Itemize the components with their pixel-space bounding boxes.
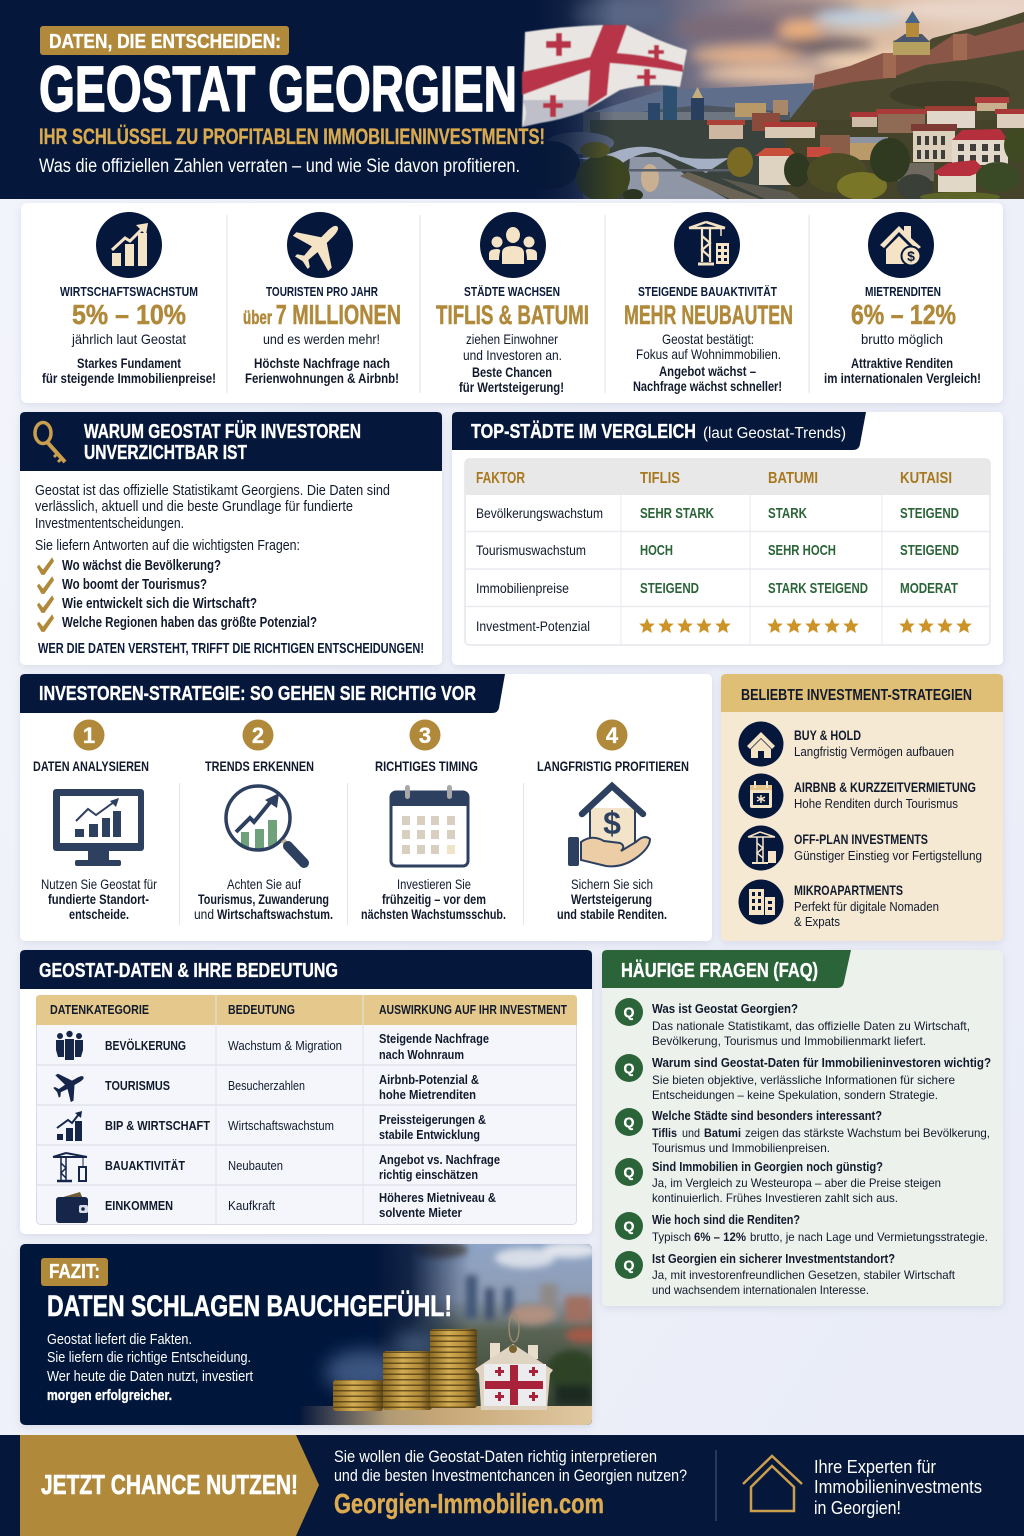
icon: crane	[53, 1153, 87, 1181]
experts text: Immobilieninvestments	[814, 1476, 982, 1497]
flag house	[475, 1314, 553, 1410]
FAQ 2: Entscheidungen – keine Spekulation, sondern Strategie.	[652, 1088, 938, 1102]
FAQ 5: 6% – 12%	[694, 1230, 746, 1244]
table header: BATUMI	[768, 470, 818, 487]
FAQ 5	[615, 1212, 988, 1244]
FAQ 5: brutto, je nach Lage und Vermietungsstrategie.	[750, 1230, 988, 1244]
icon: airplane	[284, 209, 355, 280]
caption	[557, 877, 667, 922]
row: Bauaktivität: Angebot vs. Nachfrage	[379, 1152, 500, 1167]
heading	[20, 674, 505, 713]
caption: und stabile Renditen.	[557, 907, 667, 922]
item: Airbnb	[738, 774, 976, 818]
stat: Städte wachsen: Beste Chancen	[472, 365, 552, 380]
row: Einkommen: EINKOMMEN	[105, 1198, 173, 1213]
icon: house	[738, 722, 784, 766]
step number: 2	[252, 723, 264, 748]
subtitle: IHR SCHLÜSSEL ZU PROFITABLEN IMMOBILIENINVESTMENTS!	[39, 124, 545, 149]
row: Immobilienpreise	[476, 580, 958, 597]
row: Immobilienpreise: STARK STEIGEND	[768, 580, 868, 597]
icon: crane	[674, 212, 740, 278]
table header: FAKTOR	[476, 470, 525, 487]
caption	[361, 877, 506, 922]
text block: introduction: Geostat ist das offizielle Statistikamt Georgiens. Die Daten sind	[35, 483, 390, 499]
row: Tourismuswachstum: HOCH	[640, 542, 673, 559]
panel: Geostat-Daten	[20, 950, 592, 1234]
row: Investment-Potenzial: Investment-Potenzial	[476, 618, 590, 634]
FAQ 3: und	[682, 1126, 700, 1140]
stat: Mietrenditen	[824, 212, 981, 386]
heading: GEOSTAT-DATEN & IHRE BEDEUTUNG	[39, 960, 338, 982]
stat: Steigende Bauaktivität: MEHR NEUBAUTEN	[624, 300, 793, 330]
FAQ 1: Was ist Geostat Georgien?	[652, 1002, 798, 1016]
icon: airplane	[48, 1064, 91, 1106]
stat: Wirtschaftswachstum: jährlich laut Geostat	[71, 331, 186, 347]
row: Bevölkerung: nach Wohnraum	[379, 1047, 464, 1062]
panel: Warum Geostat	[20, 412, 442, 665]
step number: 1	[83, 723, 95, 748]
row: Bauaktivität	[53, 1152, 500, 1182]
experts text: Ihre Experten für	[814, 1456, 936, 1477]
caption	[41, 877, 157, 922]
FAQ 3: Tiflis	[652, 1126, 677, 1140]
step number: 4	[606, 723, 619, 748]
caption: Sichern Sie sich	[571, 877, 653, 892]
FAQ 3	[615, 1108, 990, 1155]
stat: Wirtschaftswachstum: für steigende Immobilienpreise!	[42, 371, 216, 386]
FAQ 5: Typisch	[652, 1230, 691, 1244]
row: BIP & Wirtschaft: stabile Entwicklung	[379, 1127, 480, 1142]
table header	[476, 470, 952, 487]
stat: Touristen pro Jahr: Ferienwohnungen & Airbnb!	[245, 371, 399, 386]
heading: WARUM GEOSTAT FÜR INVESTOREN	[84, 420, 361, 443]
icon: house in hand: $	[603, 805, 621, 841]
step 2: Trends erkennen: TRENDS ERKENNEN	[205, 758, 314, 774]
footer call to action	[0, 1435, 1024, 1536]
row: Tourismuswachstum: Tourismuswachstum	[476, 542, 586, 558]
caption	[194, 877, 333, 922]
FAQ 1: Bevölkerung, Tourismus und Immobilienmarkt liefert.	[652, 1034, 926, 1048]
row: Einkommen: solvente Mieter	[379, 1205, 462, 1220]
callout: WER DIE DATEN VERSTEHT, TRIFFT DIE RICHTIGEN ENTSCHEIDUNGEN!	[38, 641, 424, 657]
icon: calendar	[738, 774, 784, 818]
FAQ 4: Ja, im Vergleich zu Westeuropa – aber die Preise steigen	[652, 1176, 941, 1190]
FAQ 3: zeigen das stärkste Wachstum bei Bevölkerung,	[745, 1126, 990, 1140]
text block: introduction: verlässlich, aktuell und die beste Grundlage für fundierte	[35, 499, 353, 515]
item: Off-Plan: OFF-PLAN INVESTMENTS	[794, 831, 928, 847]
FAQ 5: Wie hoch sind die Renditen?	[652, 1213, 800, 1227]
panel: Beliebte Investment-Strategien	[721, 674, 1003, 941]
text block: introduction	[35, 483, 390, 554]
FAQ 3: Tourismus und Immobilienpreisen.	[652, 1141, 830, 1155]
row: Tourismus	[48, 1064, 479, 1106]
CTA text: Georgien-Immobilien.com	[334, 1488, 604, 1519]
stat: Städte wachsen: TIFLIS & BATUMI	[436, 300, 589, 330]
stat: Steigende Bauaktivität: Fokus auf Wohnimmobilien.	[636, 346, 781, 362]
row: Bevölkerungswachstum: SEHR STARK	[640, 505, 714, 522]
stat: Städte wachsen: ziehen Einwohner	[466, 331, 558, 347]
row: Bevölkerung: BEVÖLKERUNG	[105, 1038, 186, 1053]
icon: growth chart	[96, 212, 162, 278]
text block: Sie liefern die richtige Entscheidung.	[47, 1350, 251, 1366]
Q badge	[615, 1212, 643, 1240]
table header: DATENKATEGORIE	[50, 1002, 149, 1017]
stat: Touristen pro Jahr	[243, 209, 401, 386]
row: BIP & Wirtschaft: Wirtschaftswachstum	[228, 1118, 334, 1133]
caption: und	[194, 907, 214, 922]
icon: house with dollar coin: $	[907, 248, 915, 264]
stat: Städte wachsen: für Wertsteigerung!	[459, 380, 564, 395]
row: Tourismuswachstum: STEIGEND	[900, 542, 959, 559]
stat: Touristen pro Jahr: TOURISTEN PRO JAHR	[266, 285, 378, 299]
stat: Wirtschaftswachstum: Starkes Fundament	[77, 356, 181, 371]
heading: (laut Geostat-Trends)	[703, 425, 846, 442]
row: Bauaktivität: BAUAKTIVITÄT	[105, 1158, 185, 1173]
stat: Städte wachsen: und Investoren an.	[463, 347, 562, 363]
caption: nächsten Wachstumsschub.	[361, 907, 506, 922]
experts text: in Georgien!	[814, 1497, 901, 1518]
caption: Achten Sie auf	[227, 877, 301, 892]
text block: morgen erfolgreicher.	[47, 1388, 172, 1404]
panel: FAQ	[602, 950, 1003, 1306]
item: Mikroapartments: & Expats	[794, 914, 840, 929]
row: Tourismus: hohe Mietrenditen	[379, 1087, 476, 1102]
icon: Georgian flag	[522, 25, 687, 127]
CTA text: und die besten Investmentchancen in Georgien nutzen?	[334, 1467, 687, 1485]
FAQ 4: kontinuierlich. Frühes Investieren zahlt sich aus.	[652, 1191, 898, 1205]
heading: INVESTOREN-STRATEGIE: SO GEHEN SIE RICHTIG VOR	[39, 683, 476, 705]
heading: UNVERZICHTBAR IST	[84, 442, 247, 464]
heading: DATEN SCHLAGEN BAUCHGEFÜHL!	[47, 1290, 452, 1323]
FAQ 3: Batumi	[704, 1126, 741, 1140]
icon: magnifier with chart	[226, 786, 304, 863]
row: Bevölkerungswachstum: STARK	[768, 505, 807, 522]
caption: Nutzen Sie Geostat für	[41, 877, 157, 892]
Q badge: Q	[624, 1060, 635, 1076]
stat: Wirtschaftswachstum: 5% – 10%	[72, 299, 186, 330]
stat: Mietrenditen: Attraktive Renditen	[851, 356, 953, 371]
row: Immobilienpreise: STEIGEND	[640, 580, 699, 597]
tagline: Was die offiziellen Zahlen verraten – und wie Sie davon profitieren.	[39, 156, 520, 177]
stat: Touristen pro Jahr: und es werden mehr!	[263, 331, 380, 347]
caption: frühzeitig – vor dem	[382, 892, 486, 907]
stat: Wirtschaftswachstum: WIRTSCHAFTSWACHSTUM	[60, 285, 198, 299]
item: Buy & Hold	[738, 722, 954, 766]
heading	[84, 420, 361, 464]
stat: Mietrenditen: im internationalen Vergleich!	[824, 371, 981, 386]
row: Bevölkerungswachstum: STEIGEND	[900, 505, 959, 522]
item: Airbnb: Hohe Renditen durch Tourismus	[794, 796, 958, 811]
data table	[36, 995, 577, 1225]
checklist: Welche Regionen haben das größte Potenzial?	[62, 615, 317, 631]
text block: introduction: Investmententscheidungen.	[35, 516, 184, 532]
table header: AUSWIRKUNG AUF IHR INVESTMENT	[379, 1002, 567, 1017]
tag: Daten, die entscheiden: DATEN, DIE ENTSCHEIDEN:	[49, 31, 281, 53]
stat: Steigende Bauaktivität: Angebot wächst –	[659, 364, 756, 379]
item: Airbnb: AIRBNB & KURZZEITVERMIETUNG	[794, 779, 976, 795]
hero image: Tbilisi cityscape	[520, 0, 1024, 202]
row: Einkommen	[56, 1190, 496, 1223]
row: Immobilienpreise: MODERAT	[900, 580, 958, 597]
icon: house with dollar coin	[868, 212, 934, 278]
experts text	[814, 1456, 982, 1518]
row: BIP & Wirtschaft: BIP & WIRTSCHAFT	[105, 1118, 210, 1133]
step number	[410, 720, 440, 750]
Q badge	[615, 1054, 643, 1082]
checklist: Wie entwickelt sich die Wirtschaft?	[62, 596, 257, 612]
table header: TIFLIS	[640, 470, 680, 487]
Q badge: Q	[624, 1114, 635, 1130]
image: coins and flag house	[300, 1242, 605, 1425]
row: Bevölkerung: Wachstum & Migration	[228, 1038, 342, 1053]
icon: chart	[57, 1111, 82, 1141]
row: Bauaktivität: Neubauten	[228, 1158, 283, 1173]
caption: Wertsteigerung	[571, 892, 652, 907]
Q badge: Q	[624, 1218, 635, 1234]
stat: Mietrenditen: MIETRENDITEN	[865, 285, 941, 299]
CTA arrow band	[20, 1435, 319, 1536]
row: Tourismus: Besucherzahlen	[228, 1078, 305, 1093]
CTA arrow band: JETZT CHANCE NUTZEN!	[41, 1469, 298, 1500]
step 2: Trends erkennen	[194, 720, 333, 922]
item: Mikroapartments	[738, 880, 939, 929]
step 4: Langfristig profitieren: LANGFRISTIG PROFITIEREN	[537, 758, 689, 774]
FAQ 6	[615, 1251, 956, 1297]
Q badge: Q	[624, 1164, 635, 1180]
row: Tourismus: TOURISMUS	[105, 1078, 170, 1093]
text block	[47, 1332, 253, 1404]
item: Off-Plan	[738, 826, 982, 870]
FAQ 4: Sind Immobilien in Georgien noch günstig?	[652, 1160, 883, 1174]
row: Investment-Potenzial	[476, 618, 972, 634]
checklist	[38, 558, 317, 631]
tag: Daten, die entscheiden	[40, 26, 289, 55]
row: Tourismuswachstum	[476, 542, 959, 559]
stat: Steigende Bauaktivität: Nachfrage wächst schneller!	[633, 379, 782, 394]
stat: Städte wachsen: STÄDTE WACHSEN	[464, 284, 560, 299]
panel: Investoren-Strategie	[20, 674, 712, 941]
Q badge	[615, 1158, 643, 1186]
row: Bevölkerungswachstum: Bevölkerungswachstum	[476, 505, 603, 521]
stat: Steigende Bauaktivität	[624, 212, 793, 394]
FAQ 1	[615, 998, 970, 1048]
item: Mikroapartments: Perfekt für digitale Nomaden	[794, 899, 939, 914]
FAQ 6: Ist Georgien ein sicherer Investmentstandort?	[652, 1252, 895, 1266]
CTA text	[334, 1448, 687, 1519]
row: Einkommen: Kaufkraft	[228, 1198, 275, 1213]
row: Bauaktivität: richtig einschätzen	[379, 1167, 478, 1182]
title: GEOSTAT GEORGIEN	[39, 53, 517, 125]
row: Bevölkerung: Steigende Nachfrage	[379, 1031, 489, 1046]
stat: Touristen pro Jahr: Höchste Nachfrage nach	[254, 356, 390, 371]
FAQ 2	[615, 1054, 991, 1102]
row: Tourismus: Airbnb-Potenzial &	[379, 1072, 479, 1087]
row: Einkommen: Höheres Mietniveau &	[379, 1190, 496, 1205]
FAQ 6: und wachsendem internationalen Interesse.	[652, 1283, 869, 1297]
FAQ 2: Sie bieten objektive, verlässliche Informationen für sichere	[652, 1073, 955, 1087]
icon: calendar	[390, 785, 468, 866]
step 1: Daten analysieren: DATEN ANALYSIEREN	[33, 758, 149, 774]
item: Buy & Hold: Langfristig Vermögen aufbauen	[794, 744, 954, 759]
heading	[602, 950, 851, 988]
FAQ 2: Warum sind Geostat-Daten für Immobilieninvestoren wichtig?	[652, 1056, 991, 1070]
CTA text: Sie wollen die Geostat-Daten richtig interpretieren	[334, 1448, 657, 1466]
step 3: Richtiges Timing	[361, 720, 506, 922]
step 1: Daten analysieren	[33, 720, 157, 922]
caption: Wirtschaftswachstum.	[217, 907, 333, 922]
Q badge	[615, 998, 643, 1026]
stat: Steigende Bauaktivität: STEIGENDE BAUAKTIVITÄT	[638, 284, 777, 299]
coin stacks	[333, 1329, 477, 1411]
row: Bevölkerungswachstum	[476, 505, 959, 522]
icon: wallet	[56, 1192, 88, 1223]
step 4: Langfristig profitieren	[537, 720, 689, 922]
stat: Touristen pro Jahr: über 7 MILLIONEN	[243, 299, 401, 330]
icon: apartment buildings	[738, 880, 784, 924]
text block: Geostat liefert die Fakten.	[47, 1332, 192, 1348]
heading	[452, 412, 866, 450]
step 3: Richtiges Timing: RICHTIGES TIMING	[375, 758, 478, 774]
item: Buy & Hold: BUY & HOLD	[794, 727, 861, 743]
panel: key figures	[21, 203, 1003, 403]
icon: population	[56, 1031, 83, 1060]
panel: Top-Städte	[452, 412, 1003, 665]
row: BIP & Wirtschaft	[57, 1111, 486, 1142]
heading: HÄUFIGE FRAGEN (FAQ)	[621, 959, 818, 982]
Q badge	[615, 1108, 643, 1136]
FAQ 3: Welche Städte sind besonders interessant?	[652, 1109, 882, 1123]
stat: Mietrenditen: brutto möglich	[861, 331, 943, 347]
checklist: Wo boomt der Tourismus?	[62, 577, 207, 593]
step number	[242, 720, 274, 750]
FAQ 6: Ja, mit investorenfreundlichen Gesetzen, stabiler Wirtschaft	[652, 1268, 956, 1282]
FAQ 1: Das nationale Statistikamt, das offizielle Daten zu Wirtschaft,	[652, 1019, 970, 1033]
row: Bevölkerung	[56, 1031, 489, 1062]
caption: entscheide.	[69, 907, 129, 922]
table header: BEDEUTUNG	[228, 1002, 295, 1017]
text block: Wer heute die Daten nutzt, investiert	[47, 1369, 253, 1385]
tag: Fazit: FAZIT:	[49, 1261, 100, 1283]
comparison table	[465, 459, 990, 645]
Q badge: Q	[624, 1257, 635, 1273]
hero banner	[0, 0, 1024, 202]
icon: people	[480, 212, 546, 278]
table header	[50, 1002, 567, 1017]
icon: house in hand	[568, 786, 650, 866]
tag: Fazit	[41, 1258, 108, 1286]
step number	[74, 720, 104, 750]
icon: monitor	[53, 789, 144, 866]
Q badge	[615, 1251, 643, 1279]
caption: fundierte Standort-	[48, 892, 149, 907]
FAQ 4	[615, 1158, 941, 1205]
heading: TOP-STÄDTE IM VERGLEICH	[471, 420, 696, 443]
stat: Mietrenditen: 6% – 12%	[851, 299, 956, 330]
row: Tourismuswachstum: SEHR HOCH	[768, 542, 836, 559]
row: Immobilienpreise: Immobilienpreise	[476, 580, 569, 596]
stat: Steigende Bauaktivität: Geostat bestätigt:	[662, 331, 754, 347]
icon: key	[35, 422, 65, 462]
stat: Wirtschaftswachstum	[42, 212, 216, 386]
caption: Tourismus, Zuwanderung	[198, 892, 329, 907]
panel: Fazit	[20, 1242, 605, 1425]
item: Off-Plan: Günstiger Einstieg vor Fertigstellung	[794, 848, 982, 863]
icon: house outline	[743, 1456, 802, 1511]
table header: KUTAISI	[900, 470, 952, 487]
icon: crane	[738, 826, 784, 870]
caption: Investieren Sie	[397, 877, 471, 892]
row: BIP & Wirtschaft: Preissteigerungen &	[379, 1112, 486, 1127]
step number	[596, 720, 628, 750]
item: Mikroapartments: MIKROAPARTMENTS	[794, 882, 903, 898]
Q badge: Q	[624, 1004, 635, 1020]
stat: Städte wachsen	[436, 212, 589, 395]
checklist: Wo wächst die Bevölkerung?	[62, 558, 221, 574]
text block: introduction: Sie liefern Antworten auf die wichtigsten Fragen:	[35, 538, 300, 554]
step number: 3	[419, 723, 431, 748]
